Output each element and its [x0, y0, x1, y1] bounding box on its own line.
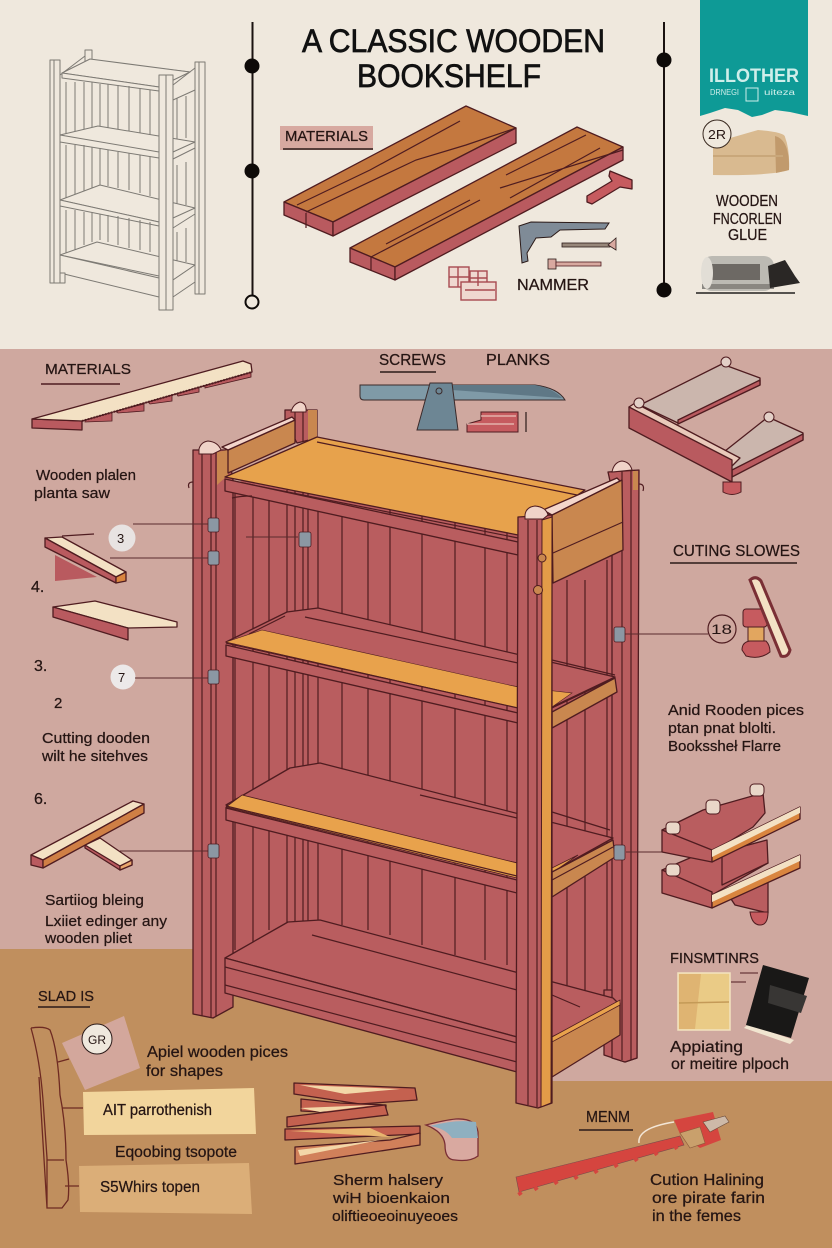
cutting text [41, 730, 150, 765]
screws and planks labels: SCREWS [379, 352, 446, 369]
line-art bookshelf [50, 50, 205, 310]
step 6 crossed planks [31, 791, 144, 870]
saw tool [360, 383, 565, 432]
menm heading: MENM [586, 1109, 630, 1126]
appiating text: or meitire plpoch [671, 1056, 789, 1073]
sherm text: Sherm halsery [333, 1172, 444, 1189]
right side panel [543, 478, 623, 583]
eqoobing text: Eqoobing tsopote [115, 1144, 237, 1161]
glue bottle [696, 256, 800, 293]
timeline left [244, 22, 260, 308]
step 3 badge: 3 [117, 531, 124, 546]
materials heading 2 [41, 361, 131, 384]
cution text: in the femes [652, 1208, 741, 1225]
wood glue label: GLUE [728, 227, 767, 244]
cution text: ore pirate farin [652, 1190, 765, 1207]
sherm text: oliftieoeoinuyeoes [332, 1208, 458, 1225]
cutting text: wilt he sitehves [41, 748, 148, 765]
cution text [650, 1172, 765, 1225]
rooden pieces text: ptan pnat blolti. [668, 720, 776, 737]
outlined wood profile [31, 1027, 83, 1208]
right front post [516, 506, 552, 1108]
red saw [516, 1112, 729, 1195]
long plank [53, 601, 177, 640]
tools: pin, hammer, bricks [449, 171, 632, 300]
wood glue label: WOODEN [716, 193, 778, 210]
cutting slowes heading: CUTING SLOWES [673, 543, 800, 560]
sandpaper sheet [678, 973, 758, 1030]
left back post and side [222, 402, 317, 473]
wooden pieces text: Apiel wooden pices [147, 1044, 288, 1061]
sanding text: Lxiiet edinger any [45, 913, 168, 930]
tan note [79, 1163, 252, 1214]
rooden pieces text [668, 702, 804, 755]
wooden pieces text: for shapes [146, 1063, 223, 1080]
title: A CLASSIC WOODEN [302, 23, 605, 59]
step labels [34, 658, 62, 712]
third shelf [226, 763, 615, 897]
materials heading 2: MATERIALS [45, 361, 131, 378]
slad is heading: SLAD IS [38, 988, 94, 1005]
bottom shelf [225, 920, 620, 1077]
cutting text: Cutting dooden [42, 730, 150, 747]
materials label [280, 126, 373, 150]
sanding text: Sartiiog bleing [45, 892, 144, 909]
wooden plank text: Wooden plalen [36, 467, 136, 484]
wood block and badge: 2R [708, 127, 726, 142]
title: BOOKSHELF [357, 58, 541, 94]
left front post [188, 441, 233, 1018]
black notebook [744, 965, 809, 1044]
step 6 crossed planks: 6. [34, 791, 47, 808]
back right post [604, 461, 644, 1062]
cream note [83, 1088, 256, 1135]
sanding text: wooden pliet [44, 930, 133, 947]
tan note: S5Whirs topen [100, 1179, 200, 1196]
timeline right [656, 22, 672, 298]
planks [284, 106, 623, 280]
wood glue label [713, 193, 782, 244]
drill icon [426, 1119, 478, 1160]
screws and planks labels: PLANKS [486, 352, 550, 369]
main bookshelf [110, 402, 708, 1108]
step 3 badge [108, 524, 136, 552]
step labels: 3. [34, 658, 47, 675]
tools: pin, hammer, bricks: NAMMER [517, 277, 589, 294]
toothed plank [32, 361, 252, 430]
rooden pieces text: Anid Rooden pices [668, 702, 804, 719]
finishers heading: FINSMTINRS [670, 950, 759, 967]
sherm text [332, 1172, 458, 1225]
pink paper note [62, 1016, 140, 1090]
step 7 badge [110, 664, 136, 690]
top shelf [225, 437, 585, 555]
materials label: MATERIALS [285, 128, 368, 145]
screws and planks labels [379, 352, 550, 372]
sherm text: wiH bioenkaion [332, 1190, 450, 1207]
step labels: 2 [54, 695, 62, 712]
appiating text: Appiating [670, 1039, 743, 1056]
teal banner [700, 0, 808, 117]
teal banner: uiteza [764, 88, 796, 97]
step 4 angled plank [31, 534, 126, 596]
teal banner: ILLOTHER [709, 66, 799, 87]
sanding text [44, 892, 168, 947]
cream note: AIT parrothenish [103, 1102, 212, 1119]
appiating text [670, 1039, 789, 1073]
plank pile [285, 1083, 420, 1164]
pink paper note: GR [88, 1033, 106, 1047]
wooden plank text: planta saw [34, 485, 110, 502]
stacked brackets [662, 784, 800, 925]
back panel [233, 445, 622, 1010]
cution text: Cution Halining [650, 1172, 764, 1189]
wood glue label: FNCORLEN [713, 211, 782, 228]
title [302, 23, 605, 94]
rooden pieces text: Bookssheł Flarre [668, 738, 781, 755]
step 4 angled plank: 4. [31, 579, 44, 596]
step 18 badge: 18 [711, 621, 732, 637]
mallet icon [742, 578, 790, 657]
clips and leader lines [110, 518, 708, 860]
middle shelf [226, 608, 617, 728]
wood block and badge [703, 120, 789, 175]
teal banner: DRNEGI [710, 88, 739, 97]
step 18 badge [708, 615, 736, 643]
wooden pieces text [146, 1044, 288, 1080]
right bench assembly [629, 357, 803, 494]
step 7 badge: 7 [118, 670, 125, 685]
back panel slats [235, 490, 607, 1020]
wooden plank text [34, 467, 136, 502]
